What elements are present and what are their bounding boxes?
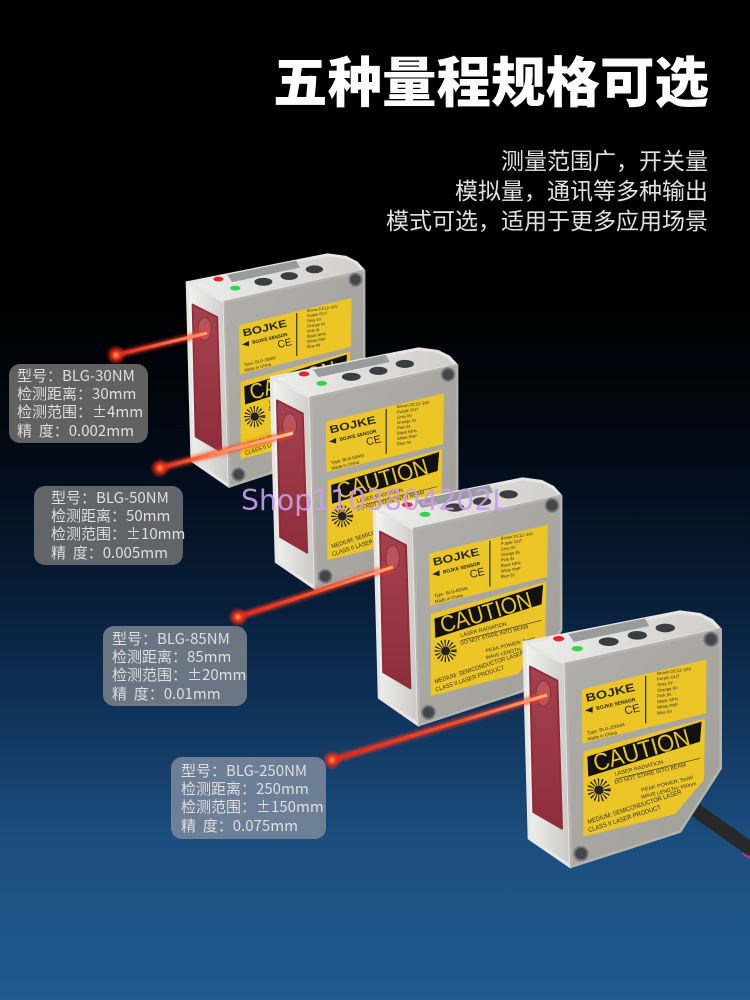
- yellow label: Pink IN: [500, 556, 514, 563]
- yellow label: BOJKE SENSOR: [339, 429, 378, 442]
- red window: [380, 532, 410, 688]
- spec card BLG-30NM: [9, 364, 148, 443]
- yellow label: Orange IN: [397, 418, 416, 425]
- yellow label: Orange IN: [657, 685, 677, 693]
- caution label: [583, 718, 705, 837]
- red window: [193, 305, 221, 452]
- caution label: CAUTION: [437, 586, 535, 638]
- yellow label: Black NPN: [307, 331, 326, 339]
- caution label: CAUTION: [247, 356, 339, 405]
- front white face: [524, 643, 571, 867]
- screws: [422, 499, 558, 719]
- laser beam BLG-250NM: [322, 695, 547, 770]
- display: [313, 355, 390, 377]
- caution label: CLASS II LASER PRODUCT: [435, 665, 506, 694]
- spec card BLG-30NM: 型号：BLG-30NM: [17, 365, 135, 386]
- yellow label: White PNP: [500, 566, 521, 574]
- yellow label: Brown DC12~24V: [307, 304, 339, 313]
- spec card BLG-85NM: 型号：BLG-85NM: [112, 628, 230, 649]
- caution label: LASER RADIATION: [460, 621, 508, 639]
- caution label: DO NOT STARE INTO BEAM: [268, 391, 334, 413]
- yellow label: Purple OUT: [500, 538, 523, 546]
- yellow label: Purple OUT: [307, 310, 328, 318]
- caution label: WAVE LENGTH: 650nm: [382, 508, 435, 525]
- top face: [271, 349, 456, 397]
- sensor cable: [690, 806, 750, 858]
- yellow label: Pink IN: [397, 424, 411, 430]
- caution label: LASER RADIATION: [356, 487, 404, 505]
- caution label: CAUTION: [590, 724, 693, 777]
- spec card BLG-50NM: 精 度：0.005mm: [51, 542, 168, 563]
- yellow label: Pink IN: [657, 692, 671, 699]
- display: [227, 261, 300, 282]
- front white face: [374, 509, 419, 725]
- sensor BLG-50NM: [271, 349, 457, 588]
- top face: [524, 612, 720, 663]
- spec card BLG-30NM: 检测范围：±4mm: [17, 401, 143, 422]
- sensor BLG-30NM: [187, 255, 364, 486]
- caution label: DO NOT STARE INTO BEAM: [614, 762, 687, 786]
- caution label: MEDIUM: SEMICONDUCTOR LASER: [434, 650, 525, 686]
- caution label: LASER RADIATION: [268, 389, 314, 406]
- top face: [374, 479, 561, 529]
- yellow label: Black NPN: [397, 428, 417, 436]
- yellow label: Brown DC12~24V: [657, 666, 692, 676]
- yellow label: Blue 0V: [397, 439, 412, 446]
- caution label: [431, 582, 546, 696]
- status lights: [213, 277, 240, 291]
- yellow label: Blue 0V: [307, 342, 321, 349]
- buttons: [445, 490, 518, 512]
- yellow label: Type: BLG-85NM: [434, 586, 468, 598]
- yellow label: Grey 0V: [500, 545, 516, 552]
- description text: 测量范围广，开关量: [501, 148, 708, 174]
- buttons: [599, 624, 675, 646]
- yellow label: CE: [469, 566, 486, 581]
- yellow label: BOJKE: [585, 682, 637, 705]
- laser beam BLG-50NM: [150, 433, 293, 478]
- caution label: MEDIUM: SEMICONDUCTOR LASER: [331, 516, 422, 550]
- caution label: MEDIUM: SEMICONDUCTOR LASER: [587, 789, 683, 826]
- yellow label: Pink IN: [307, 327, 320, 334]
- yellow label: Black NPN: [657, 696, 678, 704]
- red window: [530, 667, 562, 829]
- caution label: DO NOT STARE INTO BEAM: [356, 490, 425, 513]
- screws: [233, 274, 362, 481]
- side gray face: [566, 629, 721, 867]
- spec card BLG-85NM: [103, 626, 247, 706]
- yellow label: BOJKE SENSOR: [252, 332, 289, 345]
- yellow label: Made in China: [331, 460, 360, 471]
- spec card BLG-50NM: [34, 486, 183, 565]
- spec card BLG-250NM: 精 度：0.075mm: [181, 815, 298, 836]
- laser beam BLG-85NM: [228, 567, 393, 627]
- caution label: CLASS II LASER PRODUCT: [587, 804, 662, 834]
- caution label: PEAK POWER: 5mW: [292, 402, 341, 419]
- side gray face: [225, 271, 364, 486]
- spec card BLG-85NM: 精 度：0.01mm: [112, 683, 221, 704]
- yellow label: Made in China: [434, 593, 464, 604]
- spec card BLG-250NM: 检测范围：±150mm: [181, 796, 324, 817]
- buttons: [254, 265, 323, 286]
- caution label: PEAK POWER: 5mW: [382, 502, 432, 519]
- caution label: [327, 449, 442, 560]
- yellow label: BOJKE SENSOR: [442, 561, 481, 576]
- yellow label: White PNP: [397, 433, 417, 441]
- yellow label: [239, 298, 352, 374]
- spec card BLG-50NM: 检测距离：50mm: [51, 505, 170, 526]
- yellow label: Brown DC12~24V: [397, 400, 430, 409]
- spec card BLG-30NM: 精 度：0.002mm: [17, 420, 134, 441]
- yellow label: Type: BLG-50NM: [330, 453, 365, 465]
- spec card BLG-50NM: 型号：BLG-50NM: [51, 487, 169, 508]
- top face: [187, 255, 364, 301]
- caution label: LASER RADIATION: [614, 760, 664, 778]
- status lights: [402, 502, 430, 517]
- status lights: [299, 371, 327, 386]
- screws: [574, 633, 718, 860]
- red window: [277, 400, 307, 553]
- yellow label: Orange IN: [500, 550, 520, 557]
- yellow label: BOJKE SENSOR: [596, 697, 636, 712]
- spec card BLG-250NM: 型号：BLG-250NM: [181, 760, 307, 781]
- yellow label: CE: [365, 433, 382, 448]
- caution label: PEAK POWER: 5mW: [485, 636, 536, 654]
- yellow label: Grey 0V: [307, 316, 322, 323]
- yellow label: BOJKE: [242, 319, 288, 340]
- buttons: [342, 360, 414, 381]
- caution label: CLASS II LASER PRODUCT: [331, 530, 402, 558]
- description text: 模式可选，适用于更多应用场景: [386, 208, 708, 234]
- spec card BLG-85NM: 检测距离：85mm: [112, 646, 231, 667]
- caution label: MEDIUM: SEMICONDUCTOR LASER: [244, 416, 330, 449]
- yellow label: Type: BLG-250NM: [586, 722, 625, 736]
- yellow label: Grey 0V: [657, 680, 673, 687]
- spec card BLG-30NM: 检测距离：30mm: [17, 383, 136, 404]
- caution label: WAVE LENGTH: 650nm: [292, 408, 343, 425]
- status lights: [553, 636, 583, 651]
- spec card BLG-85NM: 检测范围：±20mm: [112, 664, 246, 685]
- caution label: WAVE LENGTH: 650nm: [641, 781, 697, 801]
- yellow label: Blue 0V: [657, 709, 673, 716]
- yellow label: BOJKE: [328, 414, 377, 436]
- caution label: WAVE LENGTH: 650nm: [485, 642, 539, 661]
- laser beam BLG-30NM: [106, 333, 207, 365]
- front white face: [187, 283, 229, 486]
- yellow label: Type: BLG-30NM: [243, 355, 276, 367]
- yellow label: Orange IN: [307, 321, 325, 329]
- yellow label: Grey 0V: [397, 413, 413, 420]
- yellow label: CE: [623, 702, 642, 718]
- caution label: DO NOT STARE INTO BEAM: [460, 624, 529, 647]
- yellow label: [326, 393, 444, 472]
- spec card BLG-250NM: [171, 757, 326, 839]
- yellow label: Brown DC12~24V: [500, 531, 534, 541]
- spec card BLG-250NM: 检测距离：250mm: [181, 778, 309, 799]
- description text: 模拟量，通讯等多种输出: [455, 178, 708, 204]
- yellow label: [582, 659, 707, 743]
- caution label: CAUTION: [334, 454, 431, 504]
- yellow label: Purple OUT: [657, 673, 680, 682]
- screws: [319, 368, 454, 582]
- side gray face: [311, 365, 457, 588]
- caution label: CLASS II LASER PRODUCT: [244, 430, 312, 457]
- spec card BLG-50NM: 检测范围：±10mm: [51, 523, 185, 544]
- yellow label: White PNP: [657, 702, 679, 710]
- caution label: PEAK POWER: 5mW: [641, 775, 694, 794]
- yellow label: White PNP: [307, 336, 327, 344]
- yellow label: Made in China: [587, 730, 618, 742]
- sensor BLG-85NM: [374, 479, 561, 725]
- yellow label: [429, 525, 548, 606]
- display: [568, 618, 649, 642]
- yellow label: Made in China: [244, 362, 272, 373]
- display: [416, 485, 493, 508]
- title: 五种量程规格可选: [273, 53, 709, 114]
- sensor BLG-250NM: [524, 612, 721, 867]
- yellow label: Black NPN: [500, 560, 521, 568]
- description text: [386, 148, 708, 234]
- yellow label: BOJKE: [432, 546, 481, 569]
- watermark: Shop1103804202L: [241, 484, 508, 517]
- yellow label: Blue 0V: [500, 572, 516, 579]
- caution label: [241, 351, 350, 459]
- yellow label: Purple OUT: [397, 406, 419, 414]
- yellow label: CE: [277, 337, 293, 351]
- side gray face: [414, 496, 561, 725]
- front white face: [271, 378, 315, 588]
